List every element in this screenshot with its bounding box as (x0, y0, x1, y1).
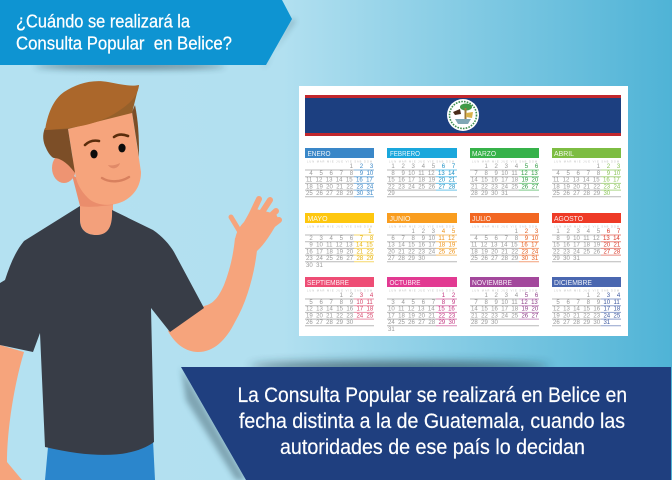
calendar month: marzo: 21 22 23 24 25 26 27 (471, 184, 539, 190)
calendar month: julio: 4 5 6 7 8 9 10 (471, 236, 539, 242)
calendar month: febrero: 1 2 3 4 5 6 7 (388, 164, 456, 170)
calendar month: mayo: LUN MAR MIE JUE VIE SAB DOM (307, 224, 372, 228)
nose (108, 163, 120, 168)
calendar month: diciembre: DICIEMBRE (554, 278, 592, 287)
left arm (0, 345, 24, 480)
hair (43, 81, 139, 173)
calendar month: junio: 13 14 15 16 17 18 19 (388, 242, 456, 248)
calendar month: julio: 11 12 13 14 15 16 17 (471, 242, 538, 248)
calendar month: julio (470, 213, 539, 262)
neck (80, 195, 113, 235)
calendar month: marzo: LUN MAR MIE JUE VIE SAB DOM (472, 160, 537, 164)
calendar month: mayo: 16 17 18 19 20 21 22 (306, 249, 374, 255)
calendar month: marzo: MARZO (472, 149, 496, 158)
calendar month: septiembre: 12 13 14 15 16 17 18 (306, 306, 374, 312)
calendar month: junio: 20 21 22 23 24 25 26 (388, 249, 456, 255)
calendar month: diciembre: 26 27 28 29 30 31 (553, 320, 611, 326)
calendar month: junio: 27 28 29 30 (388, 256, 426, 262)
calendar month: diciembre (552, 277, 621, 326)
calendar month: junio: LUN MAR MIE JUE VIE SAB DOM (389, 224, 454, 228)
calendar month: enero (305, 148, 374, 197)
calendar month: mayo: 9 10 11 12 13 14 15 (306, 242, 373, 248)
calendar month: agosto: 15 16 17 18 19 20 21 (553, 242, 621, 248)
Belize flag banner (305, 95, 621, 136)
calendar month: octubre: LUN MAR MIE JUE VIE SAB DOM (389, 288, 454, 292)
calendar month: marzo: 14 15 16 17 18 19 20 (471, 178, 539, 184)
calendar month: octubre: 3 4 5 6 7 8 9 (388, 300, 456, 306)
calendar month: marzo: 28 29 30 31 (471, 191, 509, 197)
mouth (102, 177, 129, 181)
calendar month: mayo: 1 (306, 229, 372, 235)
calendar month: diciembre: 12 13 14 15 16 17 18 (553, 306, 621, 312)
calendar month: abril: 11 12 13 14 15 16 17 (553, 178, 620, 184)
calendar month: julio: JULIO (472, 214, 491, 223)
calendar month: enero: 4 5 6 7 8 9 10 (306, 171, 374, 177)
calendar month: enero: 1 2 3 (306, 164, 374, 170)
shirt (0, 206, 204, 455)
trousers (45, 440, 155, 480)
calendar month: agosto: 29 30 31 (553, 256, 581, 262)
calendar month: mayo (305, 213, 374, 269)
face (68, 112, 141, 205)
calendar month: noviembre: 14 15 16 17 18 19 20 (471, 306, 539, 312)
calendar month: abril: 4 5 6 7 8 9 10 (553, 171, 621, 177)
calendar month: enero: 25 26 27 28 29 30 31 (306, 191, 374, 197)
calendar month: noviembre: LUN MAR MIE JUE VIE SAB DOM (472, 288, 537, 292)
calendar month: enero: ENERO (308, 149, 331, 158)
calendar month: octubre: OCTUBRE (390, 278, 420, 287)
raised arm and hand (168, 199, 279, 352)
calendar month: octubre: 1 2 (388, 293, 456, 299)
calendar month: septiembre: 5 6 7 8 9 10 11 (306, 300, 373, 306)
calendar month: noviembre: 28 29 30 (471, 320, 499, 326)
bottom message panel: fecha distinta a la de Guatemala, cuando las (239, 410, 625, 433)
calendar month: junio (387, 213, 457, 262)
calendar month: agosto (552, 213, 621, 262)
calendar month: febrero: 22 23 24 25 26 27 28 (388, 184, 456, 190)
calendar month: febrero: LUN MAR MIE JUE VIE SAB DOM (389, 160, 454, 164)
calendar month: septiembre: 19 20 21 22 23 24 25 (306, 313, 374, 319)
calendar month: agosto: 8 9 10 11 12 13 14 (553, 236, 620, 242)
calendar month: mayo: MAYO (308, 214, 328, 223)
calendar month: febrero (387, 148, 457, 197)
calendar month: abril (552, 148, 621, 197)
calendar month: marzo: 1 2 3 4 5 6 (471, 164, 539, 170)
calendar month: junio: JUNIO (390, 214, 411, 223)
shadow: bottom panel (250, 362, 550, 372)
calendar month: octubre: 17 18 19 20 21 22 23 (388, 313, 456, 319)
calendar month: diciembre: LUN MAR MIE JUE VIE SAB DOM (554, 288, 619, 292)
eyes (90, 144, 126, 158)
calendar month: septiembre: 1 2 3 4 (306, 293, 374, 299)
calendar month: mayo: 23 24 25 26 27 28 29 (306, 256, 374, 262)
title text: ¿Cuándo se realizará la (16, 10, 191, 31)
calendar month: noviembre (470, 277, 539, 326)
calendar month: octubre (387, 277, 457, 333)
calendar month: abril: 1 2 3 (553, 164, 621, 170)
calendar month: febrero: FEBRERO (390, 149, 420, 158)
calendar month: noviembre: 1 2 3 4 5 6 (471, 293, 539, 299)
icon: Belize coat of arms (447, 99, 479, 131)
shadow: title banner (35, 63, 225, 69)
calendar month: octubre: 24 25 26 27 28 29 30 (388, 320, 456, 326)
calendar month: julio: 1 2 3 (471, 229, 539, 235)
calendar month: noviembre: 21 22 23 24 25 26 27 (471, 313, 539, 319)
calendar month: enero: 11 12 13 14 15 16 17 (306, 178, 373, 184)
message text: La Consulta Popular se realizará en Belice en (238, 384, 627, 407)
calendar month: marzo: 7 8 9 10 11 12 13 (471, 171, 538, 177)
calendar month: septiembre: LUN MAR MIE JUE VIE SAB DOM (307, 288, 372, 292)
calendar month: septiembre (305, 277, 374, 326)
calendar month: abril: 25 26 27 28 29 30 (553, 191, 611, 197)
calendar month: octubre: 10 11 12 13 14 15 16 (388, 306, 455, 312)
calendar month: agosto: AGOSTO (554, 214, 583, 223)
ear (52, 153, 76, 183)
calendar month: abril: LUN MAR MIE JUE VIE SAB DOM (554, 160, 619, 164)
bottom message panel: autoridades de ese país lo decidan (280, 436, 585, 459)
eyebrows (85, 135, 128, 145)
calendar month: agosto: 1 2 3 4 5 6 7 (553, 229, 621, 235)
calendar month: diciembre: 5 6 7 8 9 10 11 (553, 300, 620, 306)
calendar month: septiembre: SEPTIEMBRE (307, 278, 349, 287)
calendar month: febrero: 8 9 10 11 12 13 14 (388, 171, 455, 177)
calendar month: noviembre: NOVIEMBRE (472, 278, 512, 287)
calendar month: febrero: 29 (388, 191, 395, 197)
calendar month: julio: 25 26 27 28 29 30 31 (471, 256, 539, 262)
calendar month: octubre: 31 (388, 327, 395, 333)
calendar poster (299, 86, 628, 336)
calendar month: mayo: 30 31 (306, 263, 323, 269)
calendar month: agosto: LUN MAR MIE JUE VIE SAB DOM (554, 224, 619, 228)
calendar month: enero: LUN MAR MIE JUE VIE SAB DOM (307, 160, 372, 164)
bottom message panel (181, 367, 671, 480)
calendar month: diciembre: 19 20 21 22 23 24 25 (553, 313, 621, 319)
calendar month: febrero: 15 16 17 18 19 20 21 (388, 178, 456, 184)
calendar month: diciembre: 1 2 3 4 (553, 293, 621, 299)
calendar month: enero: 18 19 20 21 22 23 24 (306, 184, 374, 190)
title banner (0, 0, 292, 65)
title banner: Consulta Popular en Belice? (16, 32, 232, 53)
calendar month: noviembre: 7 8 9 10 11 12 13 (471, 300, 538, 306)
calendar month: mayo: 2 3 4 5 6 7 8 (306, 236, 374, 242)
calendar month: abril: ABRIL (554, 149, 574, 158)
calendar month: marzo (470, 148, 539, 197)
calendar month: agosto: 22 23 24 25 26 27 28 (553, 249, 621, 255)
illustration: waving man (0, 81, 279, 480)
calendar month: julio: 18 19 20 21 22 23 24 (471, 249, 539, 255)
calendar month: julio: LUN MAR MIE JUE VIE SAB DOM (472, 224, 537, 228)
calendar month: abril: 18 19 20 21 22 23 24 (553, 184, 621, 190)
calendar month: junio: 6 7 8 9 10 11 12 (388, 236, 455, 242)
calendar month: septiembre: 26 27 28 29 30 (306, 320, 354, 326)
calendar month: junio: 1 2 3 4 5 (388, 229, 456, 235)
